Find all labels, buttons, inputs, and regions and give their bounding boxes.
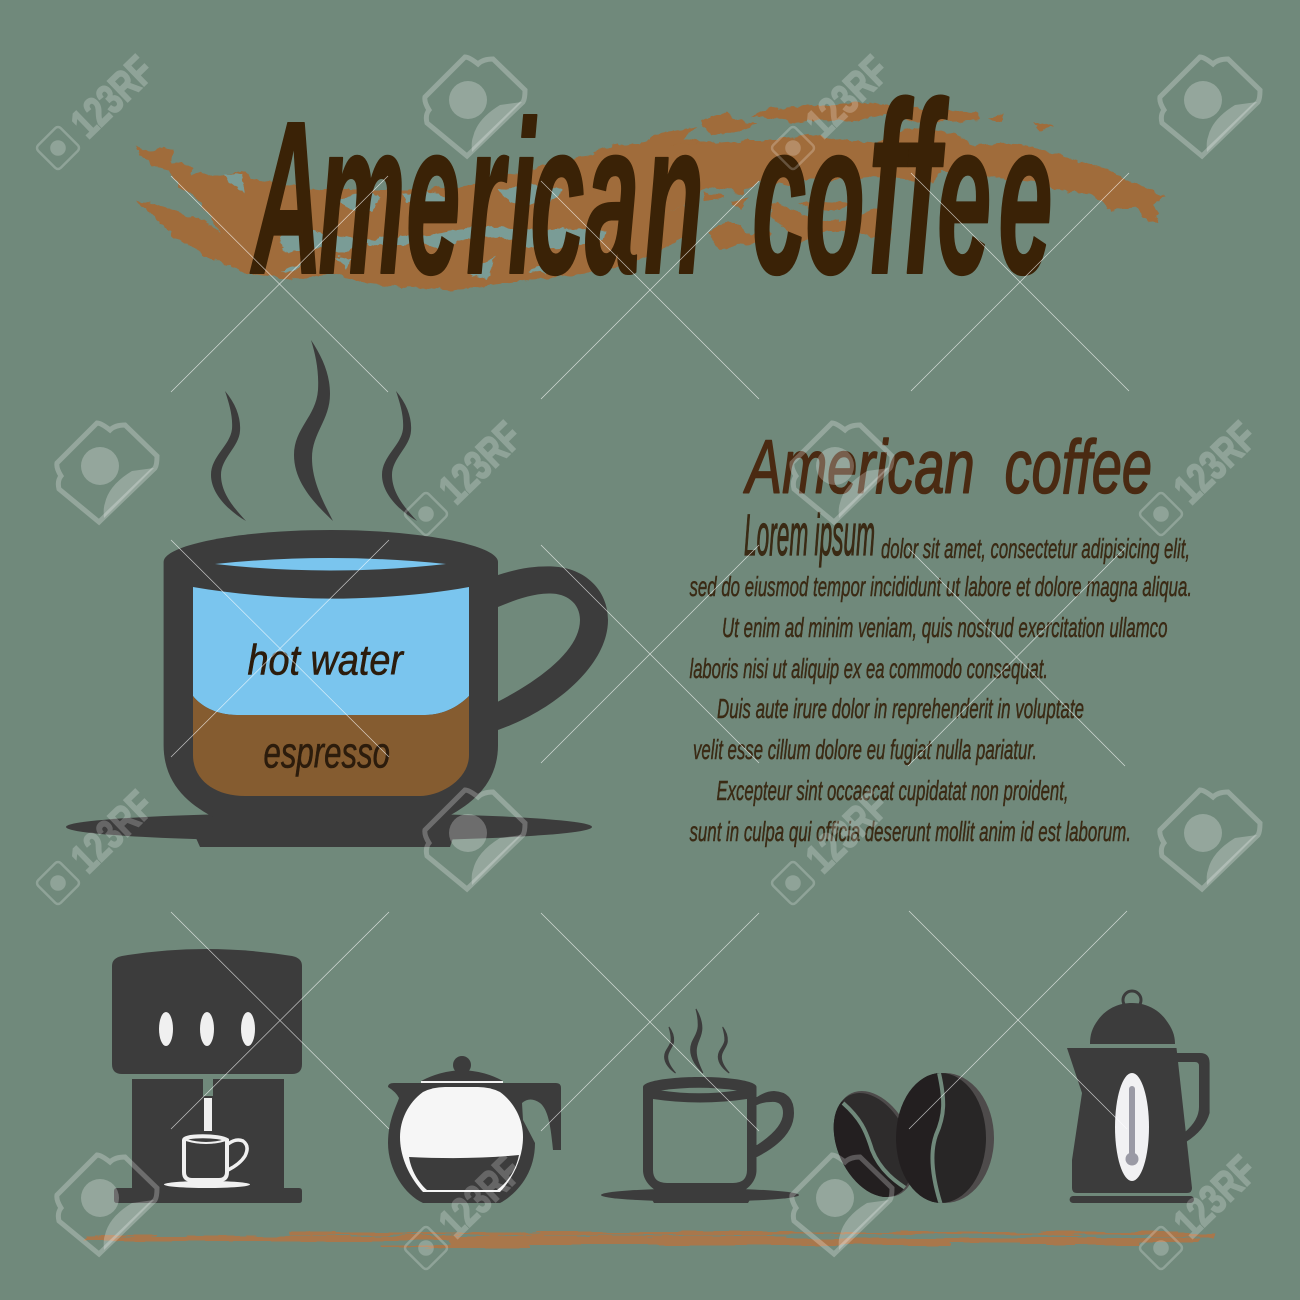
watermark: crossed lines <box>171 173 1129 1131</box>
hot water layer <box>193 587 469 715</box>
watermark: 123RF marks: 123RF <box>1165 1147 1266 1246</box>
watermark: 123RF marks: 123RF <box>797 782 898 881</box>
title: American coffee <box>250 52 1053 326</box>
watermark: 123RF marks: 123RF <box>62 782 163 881</box>
cup handle <box>490 566 608 730</box>
icon: coffee kettle <box>1067 991 1210 1203</box>
body text block: Excepteur sint occaecat cupidatat non proident, <box>716 775 1068 806</box>
brush stroke behind title <box>135 103 1165 290</box>
icon: main coffee cup with layers <box>66 340 608 847</box>
icon: glass coffee carafe <box>388 1056 561 1203</box>
subheading: American coffee <box>743 425 1152 510</box>
bottom brush line <box>85 1232 1215 1247</box>
body text block: velit esse cillum dolore eu fugiat nulla pariatur. <box>693 734 1037 765</box>
watermark: 123RF marks: 123RF <box>1165 413 1266 512</box>
body text block <box>690 503 1192 847</box>
label: espresso: espresso <box>264 728 390 778</box>
watermark: 123RF marks: 123RF <box>430 413 531 512</box>
icon: espresso machine <box>112 949 302 1203</box>
cup body <box>164 530 498 818</box>
watermark: 123RF marks: 123RF <box>797 47 898 146</box>
watermark: 123RF marks: 123RF <box>62 47 163 146</box>
steam <box>211 340 417 521</box>
body text block: laboris nisi ut aliquip ex ea commodo consequat. <box>690 653 1048 684</box>
label: hot water: hot water <box>248 637 404 685</box>
icon: coffee beans <box>834 1073 994 1203</box>
water surface <box>215 558 446 570</box>
body text block: Lorem ipsum <box>744 503 875 568</box>
saucer <box>66 813 592 847</box>
watermark: 123RF marks: 123RF <box>430 1147 531 1246</box>
icon: small cup with steam <box>601 1009 799 1203</box>
espresso layer <box>193 696 469 796</box>
